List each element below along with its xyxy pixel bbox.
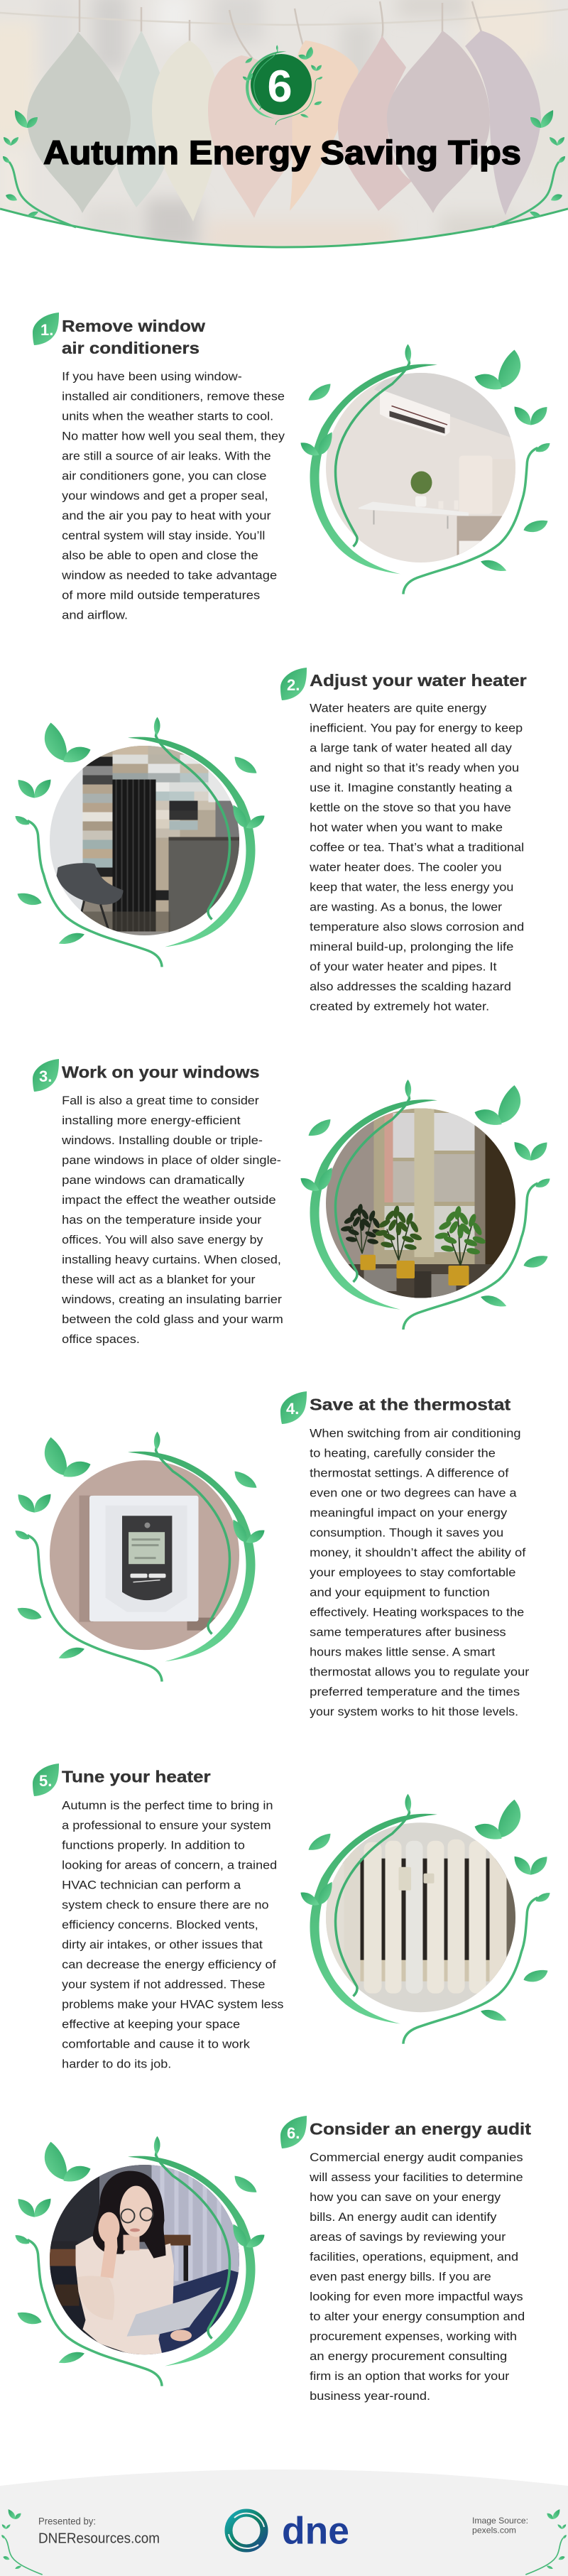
heading 2: Adjust your water heater <box>310 671 527 690</box>
body text 2: keep that water, the less energy you <box>310 881 513 894</box>
panel: header hanging leaves photo <box>0 0 568 246</box>
body text 4: to heating, carefully consider the <box>310 1447 496 1460</box>
body text 1: and airflow. <box>62 608 128 622</box>
panel: tip 4 save at the thermostat <box>16 1391 530 1719</box>
body text 4: thermostat settings. A difference of <box>310 1467 509 1480</box>
heading 3: Work on your windows <box>62 1063 260 1082</box>
body text 3: office spaces. <box>62 1332 140 1346</box>
badge 5 <box>33 1763 59 1796</box>
heading 1: Remove window <box>62 317 205 335</box>
badge 5: 5. <box>39 1772 52 1790</box>
badge 1 <box>33 313 59 345</box>
body text 2: Water heaters are quite energy <box>310 702 487 715</box>
body text 5: efficiency concerns. Blocked vents, <box>62 1918 258 1931</box>
body text 4: When switching from air conditioning <box>310 1427 521 1440</box>
body text 4: your employees to stay comfortable <box>310 1566 515 1580</box>
body text 3: installing more energy-efficient <box>62 1114 241 1127</box>
body text 4: preferred temperature and the times <box>310 1685 520 1699</box>
body text 6 <box>309 2151 525 2403</box>
body text 1: units when the weather starts to cool. <box>62 409 273 423</box>
badge 6: 6. <box>287 2124 300 2142</box>
panel: footer <box>0 2469 568 2576</box>
photo: windows with potted plants <box>325 1108 515 1298</box>
body text 4: even one or two degrees can have a <box>310 1487 517 1500</box>
body text 1: of more mild outside temperatures <box>62 588 260 602</box>
badge 1: 1. <box>40 321 53 339</box>
body text 6: to alter your energy consumption and <box>310 2310 525 2323</box>
wreath decoration <box>16 1432 264 1682</box>
panel: tip 3 work on your windows <box>33 1059 550 1346</box>
heading 1: air conditioners <box>62 339 200 357</box>
body text 3: Fall is also a great time to consider <box>62 1094 259 1107</box>
badge 4: 4. <box>286 1400 299 1418</box>
title: Autumn Energy Saving Tips <box>43 134 521 171</box>
body text 1: your windows and get a proper seal, <box>62 489 268 503</box>
curved green header edge <box>0 209 568 247</box>
body text 1 <box>61 369 285 622</box>
body text 2: also addresses the scalding hazard <box>310 980 511 994</box>
body text 1: installed air conditioners, remove these <box>62 389 285 403</box>
body text 3: these will act as a blanket for your <box>62 1273 256 1286</box>
body text 5: functions properly. In addition to <box>62 1838 245 1852</box>
presented by: DNEResources.com <box>38 2531 160 2547</box>
body text 4: same temperatures after business <box>310 1626 506 1639</box>
body text 6: firm is an option that works for your <box>310 2369 510 2383</box>
body text 3: installing heavy curtains. When closed, <box>62 1253 281 1266</box>
badge 2 <box>280 668 307 700</box>
photo: cast iron radiator <box>325 1822 515 2013</box>
badge 3: 3. <box>39 1067 52 1085</box>
photo: woman reading a document <box>50 2165 240 2355</box>
badge 4 <box>280 1391 307 1424</box>
heading 5: Tune your heater <box>62 1768 211 1786</box>
body text 4: and your equipment to function <box>310 1586 490 1599</box>
heading 1 <box>62 317 205 357</box>
body text 5: a professional to ensure your system <box>62 1818 271 1832</box>
body text 1: are still a source of air leaks. With the <box>62 449 271 463</box>
leaves row <box>27 31 541 222</box>
body text 2: are wasting. As a bonus, the lower <box>310 901 502 914</box>
body text 3: windows. Installing double or triple- <box>61 1134 263 1147</box>
wreath decoration <box>301 1080 550 1330</box>
panel: tip 1 remove window air conditioners <box>33 313 550 622</box>
body text 4 <box>310 1427 530 1719</box>
body text 1: window as needed to take advantage <box>61 568 277 582</box>
body text 3: between the cold glass and your warm <box>62 1313 283 1326</box>
heading 6: Consider an energy audit <box>310 2120 531 2138</box>
body text 1: and the air you pay to heat with your <box>62 509 271 523</box>
photo: wall thermostat <box>50 1460 240 1651</box>
badge 6 <box>280 2116 307 2148</box>
body text 1: If you have been using window- <box>62 369 242 384</box>
body text 5: HVAC technician can perform a <box>62 1878 241 1891</box>
badge 2: 2. <box>287 676 300 694</box>
body text 5: dirty air intakes, or other issues that <box>62 1938 263 1951</box>
header right vine <box>492 110 565 227</box>
body text 3: impact the effect the weather outside <box>62 1193 276 1207</box>
body text 2: water heater does. The cooler you <box>309 861 502 874</box>
wreath decoration <box>16 717 264 967</box>
badge 3 <box>33 1059 59 1092</box>
body text 6: areas of savings by reviewing your <box>310 2230 506 2244</box>
wreath decoration <box>301 1794 550 2044</box>
photo: tiled wall with black radiator and chair <box>50 746 240 936</box>
body text 5: effective at keeping your space <box>62 2017 240 2031</box>
body text 2: created by extremely hot water. <box>310 1000 489 1013</box>
body text 3: offices. You will also save energy by <box>62 1233 263 1246</box>
body text 6: business year-round. <box>310 2389 430 2403</box>
presented by: Presented by: <box>38 2516 96 2527</box>
body text 1: central system will stay inside. You’ll <box>62 528 265 543</box>
body text 6: procurement expenses, working with <box>310 2330 517 2343</box>
body text 1: also be able to open and close the <box>62 548 258 563</box>
body text 4: thermostat allows you to regulate your <box>310 1665 530 1679</box>
body text 1: air conditioners gone, you can close <box>62 469 266 483</box>
footer right vine <box>525 2509 567 2575</box>
header left vine <box>3 110 76 227</box>
dne logo <box>229 2510 349 2553</box>
body text 6: looking for even more impactful ways <box>310 2290 523 2303</box>
body text 4: consumption. Though it saves you <box>310 1526 503 1540</box>
panel: tip 6 consider an energy audit <box>16 2116 531 2403</box>
body text 6: how you can save on your energy <box>310 2190 501 2204</box>
body text 5: can decrease the energy efficiency of <box>62 1957 276 1971</box>
body text 5: problems make your HVAC system less <box>62 1997 283 2011</box>
body text 6: even past energy bills. If you are <box>310 2270 491 2283</box>
wreath decoration <box>16 2136 264 2386</box>
body text 2: inefficient. You pay for energy to keep <box>310 722 523 735</box>
dne logo: dne <box>282 2510 349 2553</box>
body text 2: temperature also slows corrosion and <box>310 920 524 934</box>
body text 5: comfortable and cause it to work <box>62 2037 251 2050</box>
body text 3: has on the temperature inside your <box>62 1213 262 1227</box>
photo: wall air conditioner <box>325 372 515 563</box>
body text 4: meaningful impact on your energy <box>310 1506 508 1520</box>
body text 2 <box>309 702 524 1013</box>
body text 4: money, it shouldn’t affect the ability of <box>310 1546 526 1560</box>
body text 2: use it. Imagine constantly heating a <box>310 781 513 795</box>
body text 2: hot water when you want to make <box>310 821 503 835</box>
body text 5: looking for areas of concern, a trained <box>62 1858 277 1871</box>
body text 4: hours makes little sense. A smart <box>310 1646 496 1659</box>
heading 4: Save at the thermostat <box>310 1396 511 1414</box>
body text 6: an energy procurement consulting <box>310 2349 507 2363</box>
body text 5 <box>62 1798 283 2070</box>
body text 2: mineral build-up, prolonging the life <box>310 940 513 954</box>
body text 4: effectively. Heating workspaces to the <box>310 1606 524 1619</box>
body text 2: and night so that it’s ready when you <box>310 761 519 775</box>
body text 2: a large tank of water heated all day <box>310 741 512 755</box>
body text 2: coffee or tea. That’s what a traditional <box>310 841 524 854</box>
body text 5: Autumn is the perfect time to bring in <box>62 1798 273 1812</box>
body text 2: kettle on the stove so that you have <box>310 801 511 815</box>
body text 5: harder to do its job. <box>62 2057 171 2070</box>
number badge with wreath <box>243 45 322 125</box>
wreath decoration <box>301 344 550 594</box>
body text 6: will assess your facilities to determine <box>309 2170 523 2184</box>
panel: tip 2 adjust your water heater <box>16 668 527 1013</box>
footer left vine <box>1 2509 43 2575</box>
presented by <box>38 2516 160 2547</box>
panel: tip 5 tune your heater <box>33 1763 550 2070</box>
body text 1: No matter how well you seal them, they <box>62 429 285 443</box>
body text 5: your system if not addressed. These <box>62 1977 265 1991</box>
body text 3 <box>61 1094 283 1346</box>
body text 3: pane windows in place of older single- <box>62 1153 281 1167</box>
body text 2: of your water heater and pipes. It <box>310 960 497 974</box>
number badge with wreath: 6 <box>267 62 293 112</box>
body text 3: windows, creating an insulating barrier <box>61 1293 282 1306</box>
image source: pexels.com <box>472 2526 516 2536</box>
footer background <box>0 2469 568 2576</box>
body text 6: bills. An energy audit can identify <box>310 2210 497 2224</box>
body text 4: your system works to hit those levels. <box>310 1705 518 1719</box>
image source: Image Source: <box>472 2516 528 2526</box>
body text 3: pane windows can dramatically <box>62 1173 245 1187</box>
body text 6: Commercial energy audit companies <box>310 2151 523 2164</box>
body text 5: system check to ensure there are no <box>62 1898 268 1911</box>
body text 6: facilities, operations, equipment, and <box>310 2250 518 2263</box>
image source <box>472 2516 528 2536</box>
